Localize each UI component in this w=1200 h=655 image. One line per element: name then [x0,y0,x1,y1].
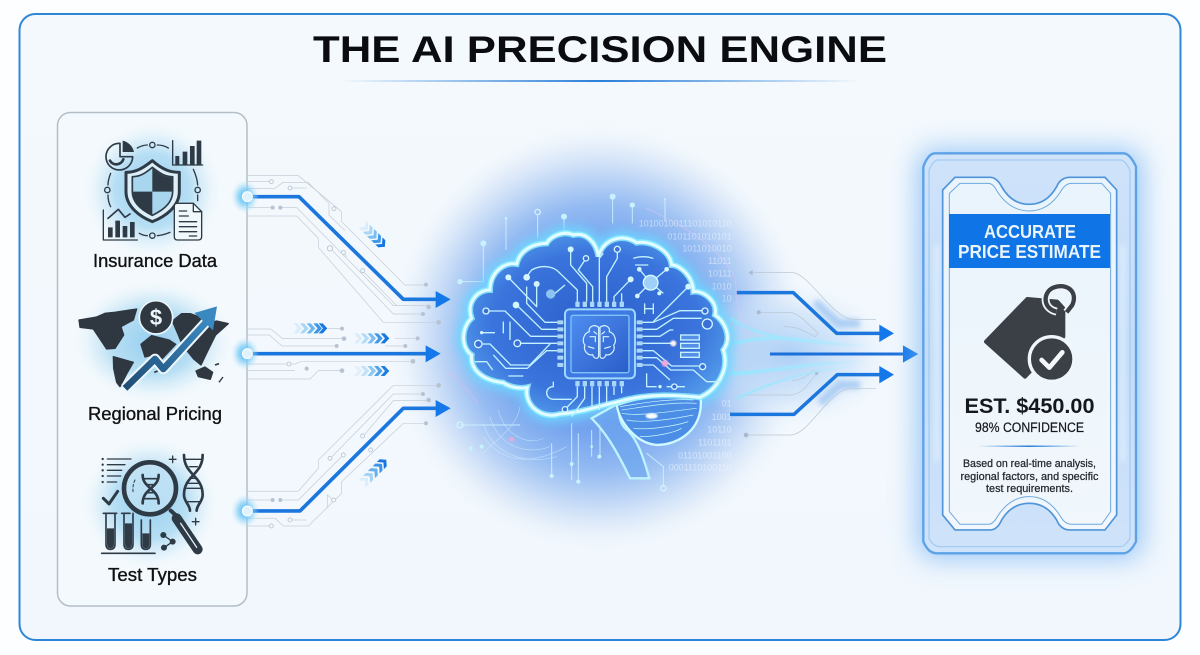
thin circuit traces [247,176,437,526]
explanation text: test requirements. [986,483,1073,495]
chevrons: middle [354,333,389,343]
binary data: 1010 [712,281,732,291]
icon: price tag with check [986,286,1074,381]
output ticket: accurate price estimate [923,153,1136,553]
AI brain [447,194,750,491]
chevrons: bottom diagonal [358,456,390,488]
ring markers [457,209,666,491]
ticket frame [923,153,1136,553]
pink energy streak left [447,372,478,403]
ticket header band [949,214,1110,268]
brain body and brain stem [464,233,727,478]
trace end dots [271,206,441,502]
temporal lobe fibres [620,400,697,437]
light streams [730,318,877,398]
icon: regional pricing: $ [150,305,162,330]
binary data: 11011 [708,256,732,266]
icon: regional pricing [75,282,232,402]
binary data: 1101101 [698,438,732,448]
binary data: 0001110100110 [669,463,732,473]
explanation text: Based on real-time analysis, [963,458,1096,470]
node glow middle [231,337,259,370]
icon: insurance data [84,123,221,257]
pink energy streak right [647,208,750,333]
arrow: bottom output [730,366,894,414]
binary data: 0101101010101 [667,231,732,241]
estimated price: EST. $450.00 [964,395,1094,418]
brain wide glow [464,233,727,415]
header text line two: PRICE ESTIMATE [958,241,1101,262]
arrow: insurance data to brain [247,197,451,308]
chevrons: middle lower [354,366,389,376]
icon: test types [83,438,217,568]
outer circuit dots [457,194,666,484]
ticket glow [918,150,1142,558]
input panel box [58,112,247,606]
input connectors [231,176,451,528]
header text: ACCURATE [984,221,1076,242]
lower network mesh [483,407,567,460]
explanation text [960,458,1099,495]
confidence: 98% CONFIDENCE [975,420,1084,435]
binary data: 10111 [708,269,732,279]
memory bars [681,335,699,357]
binary data: 10 [722,294,732,304]
arrow: centre output [770,345,918,363]
node glow top [231,180,259,213]
arrow: test types to brain [247,400,451,511]
hub node [643,275,658,290]
trace hub left [546,289,555,299]
brain background glow [388,123,812,553]
ticket divider [978,446,1080,447]
output trace ends [744,270,818,437]
node bottom [242,506,252,516]
output flow arrows [730,270,918,437]
chevrons: top diagonal [358,220,388,250]
binary data: 01101001100 [678,450,732,460]
label: insurance data: Insurance Data [93,251,218,271]
binary data [639,219,732,473]
trace dots [480,246,691,388]
label: regional pricing: Regional Pricing [88,404,222,424]
chip body [565,309,635,378]
node middle [242,349,252,359]
title underline [340,80,860,82]
binary data: 1011010010 [682,244,732,254]
chip pins [557,302,643,386]
outer circuit lines [460,197,665,487]
arrow: top output [737,293,894,342]
explanation text: regional factors, and specific [960,471,1099,483]
binary data: 1010010011101010110 [639,219,732,229]
output stream haze [685,283,895,427]
bright sparks [509,340,676,442]
panel: input sources [58,112,247,606]
label: test types: Test Types [108,565,197,585]
binary data: 01 [722,399,732,409]
binary data: 1001 [712,412,732,422]
node glow bottom [231,494,259,528]
chip brain icon [583,326,615,358]
title: THE AI PRECISION ENGINE [313,29,887,70]
binary data: 10110 [707,425,732,435]
circuit traces [475,249,720,417]
hollow trace nodes [475,246,712,412]
arrow: regional pricing to brain [247,345,441,362]
thin output traces [747,273,876,435]
trace ring nodes [269,180,373,528]
node top [242,192,252,202]
chevrons: middle upper [293,323,327,333]
arrow glow shadows [815,302,860,403]
